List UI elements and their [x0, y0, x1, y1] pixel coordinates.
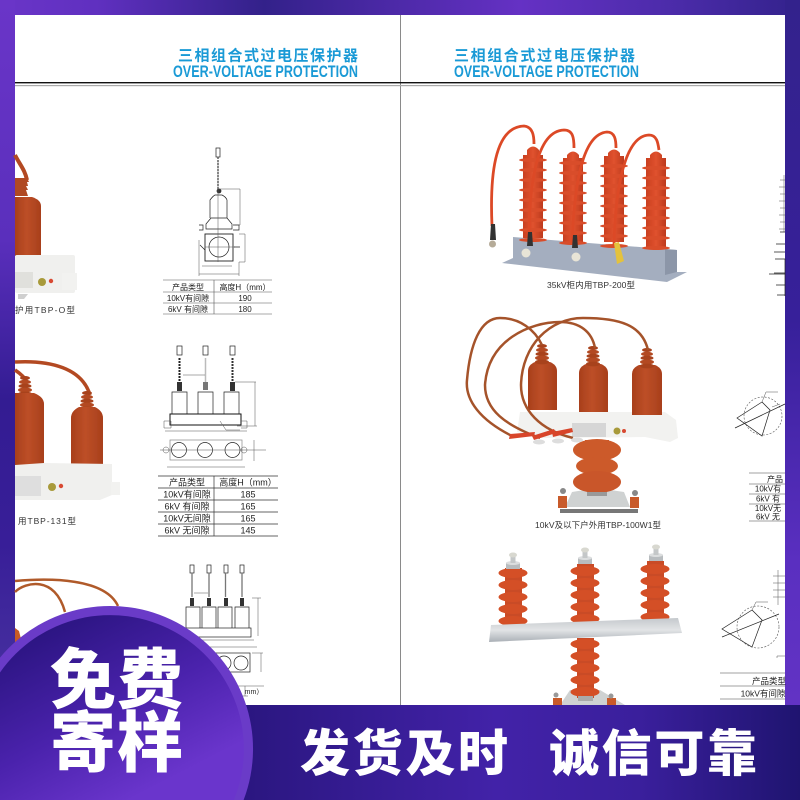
- dimension drawing: TBP-O: [199, 148, 245, 276]
- spec table: TBP-131: 产品类型: [169, 476, 205, 488]
- left title English: OVER-VOLTAGE PROTECTION: [173, 63, 358, 81]
- dimension drawing: four-pole: [170, 565, 264, 696]
- spec table: TBP-O: 10kV有间隙: [167, 293, 209, 303]
- upper columns: [498, 544, 670, 628]
- spec table: TBP-131: 6kV 无间隙: [164, 524, 210, 536]
- badge: free samples: [0, 606, 253, 800]
- product photo: TBP-131: [15, 362, 120, 500]
- product photo: TBP-O: [15, 155, 77, 299]
- spec table: TBP-O: 190: [238, 294, 252, 303]
- spec table: TBP-131: 10kV无间隙: [163, 512, 211, 524]
- spec table: TBP-131: 185: [240, 490, 256, 500]
- product label: TBP-O: 护用TBP-O型: [15, 305, 75, 315]
- right edge table upper: 10kV有: [755, 484, 781, 494]
- dimension drawing: four-pole: mm）: [245, 688, 263, 696]
- housing: [517, 412, 678, 442]
- right edge drawing: triangle mount upper: [735, 392, 785, 436]
- spec table: TBP-O: 180: [238, 305, 252, 314]
- right edge table lower: 10kV有间隙: [741, 688, 786, 698]
- header rule: [15, 82, 785, 86]
- spec table: TBP-131: [158, 476, 278, 536]
- right title Chinese: 三相组合式过电压保护器: [454, 46, 635, 64]
- spec table: TBP-131: 165: [240, 502, 256, 512]
- lugs: [490, 224, 496, 240]
- spec table: TBP-O: 产品类型: [172, 282, 204, 292]
- right edge table lower: [720, 673, 786, 699]
- spec table: TBP-131: 高度H（mm）: [219, 476, 277, 488]
- badge text line 2: 寄样: [50, 690, 183, 786]
- heading: left page: [173, 46, 358, 81]
- background frame: left band: [0, 0, 15, 800]
- lower column base: [553, 638, 625, 705]
- heading: right page: [454, 46, 639, 81]
- cables: [467, 318, 542, 436]
- page centre fold line: [400, 15, 401, 705]
- product label: TBP-200: 35kV柜内用TBP-200型: [547, 280, 635, 290]
- badge text line 1: 免费: [50, 627, 183, 723]
- right edge table upper: 产品: [767, 474, 783, 484]
- spec table: TBP-O: 高度H（mm）: [219, 282, 271, 292]
- background frame: top band: [0, 0, 800, 15]
- four red columns: [519, 146, 670, 250]
- product photo: bar-mounted arresters: [489, 544, 682, 705]
- spec table: TBP-131: 10kV有间隙: [163, 488, 211, 500]
- cables: [492, 126, 534, 226]
- bottom banner: [0, 705, 800, 800]
- product photo: lower-left cables: [15, 580, 118, 644]
- right edge table upper: 10kV无: [755, 504, 781, 513]
- product label: TBP-100W1: 10kV及以下户外用TBP-100W1型: [535, 520, 661, 530]
- right edge table lower: 产品类型: [752, 676, 786, 686]
- steel bar: [489, 618, 682, 642]
- right edge drawing: TBP-200: [769, 175, 785, 296]
- right title English: OVER-VOLTAGE PROTECTION: [454, 63, 639, 81]
- left title Chinese: 三相组合式过电压保护器: [178, 46, 358, 64]
- rust bodies: [528, 362, 557, 410]
- spec table: TBP-O: 6kV 有间隙: [168, 304, 208, 314]
- badge ring: [0, 606, 253, 800]
- right edge table upper: 6kV 无: [756, 512, 780, 522]
- dimension drawing: TBP-131: [160, 346, 266, 467]
- spec table: TBP-131: 145: [240, 526, 256, 536]
- spec table: TBP-131: 6kV 有间隙: [164, 500, 210, 512]
- spec table: TBP-O: [163, 280, 272, 314]
- background frame: right band: [785, 0, 800, 800]
- right edge drawing: triangle mount lower: [722, 570, 785, 658]
- product photo: TBP-100W1: [467, 318, 678, 513]
- spec table: TBP-131: 165: [240, 514, 256, 524]
- product label: TBP-131: 用TBP-131型: [18, 516, 76, 526]
- right edge table upper: 6kV 有: [756, 494, 780, 504]
- banner slogan: fast delivery: 发货及时: [300, 714, 508, 786]
- arrester base: [502, 237, 687, 282]
- product photo: TBP-200: [489, 126, 687, 282]
- red lugs: [509, 428, 573, 440]
- insulator and base plate: [558, 439, 639, 513]
- badge disc: [0, 615, 244, 800]
- right edge table upper: [749, 473, 785, 522]
- banner slogan: honesty and reliability: 诚信可靠: [549, 714, 757, 786]
